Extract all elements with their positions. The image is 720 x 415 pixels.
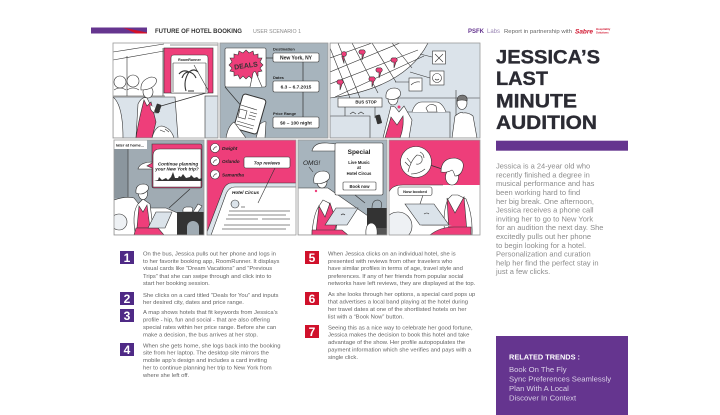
special card [335,143,383,195]
panel 7: now booked [384,140,480,240]
step 7: Seeing this as a nice way to celebrate her good fortune, [328,325,473,331]
panel 2: deals and search inputs [220,43,328,138]
field: price range: Price Range [273,111,297,116]
bus stop sign: BUS STOP [355,100,377,104]
step 7 [305,325,473,361]
intro paragraph: musical performance and has [496,179,595,188]
intro paragraph: help her find the perfect stay in [496,258,599,267]
step 3: make a decision, the bus arrives at her stop. [143,332,258,338]
step 7: single click. [328,355,358,361]
intro paragraph: been working hard to find [496,188,580,197]
phone in hand [226,93,266,138]
panel 6: special offer card [298,140,387,235]
step 5: networks have left reviews, they are displayed at the top. [328,281,476,287]
Jessica at bus stop [375,88,412,138]
hotel review card: Hotel Circus [232,190,260,195]
step 1 [120,251,280,287]
step 6: As she looks through her options, a special card pops up [328,292,476,298]
friend list [210,144,244,179]
panel 1: Jessica on the bus [113,43,218,138]
related trends panel: Book On The Fly [509,365,567,374]
step 1: to her favorite booking app, RoomRunner. It displays [143,259,280,265]
man [452,95,477,138]
special card: Live Music [348,160,370,165]
main title: MINUTE [496,90,577,112]
step 4: 4 [124,343,131,357]
bubble: continue planning [147,144,202,188]
friend list: Samantha [222,172,244,178]
step 5: 5 [309,251,316,265]
step 1: On the bus, Jessica pulls out her phone and logs in [143,252,276,258]
panel 4: later at home [111,140,204,235]
intro paragraph: for an audition the next day. She [496,223,603,232]
step 3: special rates within her price range. Before she can [143,325,276,331]
step 2: her desired city, dates and price range. [143,300,244,306]
intro paragraph: just a few clicks. [495,267,550,276]
bubble: continue planning: Continue planning [158,162,198,166]
lamp [138,162,154,169]
map pins [337,50,397,90]
connector lines [225,58,303,123]
step 1: 1 [124,251,131,265]
step 5 [305,251,476,287]
bus seats [330,90,480,138]
step 7: 7 [309,325,316,339]
step 3: profile - hip, fun and social - that are also offering [143,317,270,323]
callout: top reviews: Top reviews [254,160,281,166]
partner credits: Sabre [575,28,593,36]
Jessica with laptop [134,184,172,235]
special card: Special [348,149,371,156]
partner credits: Report in partnership with [504,29,572,35]
sofa [114,197,180,235]
intro paragraph: recently finished a degree in [496,170,590,179]
step 3: 3 [124,309,131,323]
special card: at [357,165,361,170]
callout: now booked: Now booked [403,189,427,194]
intro paragraph: excitedly pulls out her phone [496,232,591,241]
step 7: payment information which she verifies and pays with a [328,347,472,353]
header bar logo [91,28,147,34]
intro paragraph: to begin looking for a hotel. [496,241,586,250]
shopping bag [367,200,387,235]
step 2: She clicks on a card titled “Deals for You” and inputs [143,293,279,299]
laptop [405,204,452,226]
step 6: her travel dates at one of the shortlisted hotels on her [328,307,466,313]
special card: Book now [349,184,370,189]
step 1: visual cards like “Dream Vacations” and “Previous [143,266,272,272]
step 1: Trips” that she can swipe through and click into to [143,274,272,280]
side table [177,204,204,235]
intro paragraph: Personalization and curation [496,250,591,259]
step 5: have similar profiles in terms of age, travel style and [328,266,463,272]
intro paragraph: Jessica receives a phone call [496,206,594,215]
step 1: start her booking session. [143,281,210,287]
step 6: list with a “Book Now” button. [328,315,404,321]
main title: LAST [496,68,548,90]
friend list: Dwight [222,146,238,151]
main title: AUDITION [496,112,597,134]
related trends panel: Sync Preferences Seamlessly [509,374,611,383]
step 4: where she left off. [142,373,190,379]
Jessica with phone [136,77,174,138]
partner credits: Hospitality [596,27,611,31]
header title: FUTURE OF HOTEL BOOKING [155,28,242,35]
step 4 [120,343,280,379]
field: destination: Destination [273,46,295,52]
caption: later at home... [116,142,144,148]
map [330,43,432,98]
map icons [409,51,446,91]
step 7: advantage of the show. Her profile autopopulates the [328,340,465,346]
step 3: A map shows hotels that fit keywords from Jessica’s [143,310,278,316]
special card: Hotel Circus [347,171,372,176]
main title [496,46,600,134]
related trends panel [496,336,628,415]
step 2: 2 [124,292,131,306]
header subtitle: USER SCENARIO 1 [253,29,301,35]
step 5: preferences. If any of her friends from popular social [328,274,463,280]
field: price range [273,111,319,128]
partner credits: Labs [487,29,500,35]
field: destination [273,46,319,62]
sofa cushion [384,212,412,240]
deals inset: DEALS [234,61,259,72]
field: price range: $0 – 100 night [280,120,312,126]
thought circle [400,146,442,178]
step 6: that advertises a local band playing at the hotel during [328,300,468,306]
step 4: mobile app’s design and includes a card inviting [143,358,267,364]
step 7: Jessica makes the decision to book this hotel and take [328,333,469,339]
friend list: Orlando [222,159,240,164]
bus stop sign [338,98,382,118]
bus seats [113,96,218,138]
step 5: When Jessica clicks on an individual hotel, she is [328,252,456,258]
lamp [312,143,336,151]
field: dates: 6.3 – 6.7.2015 [281,84,312,90]
intro paragraph: Jessica is a 24-year old who [496,162,590,170]
main title: JESSICA’S [496,46,600,68]
step 6 [305,292,476,321]
related trends panel: Discover In Context [509,393,577,402]
panel 5: friends and top reviews [207,140,298,238]
partner credits: Solutions [596,30,609,34]
title accent bar [496,141,628,151]
app card on pink: RoomRunner [178,58,201,62]
step 3 [120,309,278,338]
related trends panel: RELATED TRENDS : [509,352,580,361]
field: dates: Dates [273,75,285,80]
background passengers [114,75,139,90]
panel 3: hotel map and bus stop [330,43,480,138]
partner credits [468,27,611,36]
intro paragraph: her big break. One afternoon, [496,197,594,206]
bubble: continue planning: your New York trip? [154,166,199,172]
step 5: presented with reviews from other travelers who [328,259,453,265]
step 4: her to continue planning her trip to New York from [143,365,272,371]
exclamation: OMG: OMG! [303,160,321,167]
field: destination: New York, NY [280,56,313,62]
related trends panel: Plan With A Local [509,384,569,393]
step 2 [120,292,279,306]
pointer line [161,93,206,106]
Jessica booked [430,158,472,235]
partner credits: PSFK [468,29,485,35]
sofa and room [298,188,367,234]
step 4: site from her laptop. The desktop site mirrors the [143,351,269,357]
step 6: 6 [309,292,316,306]
intro paragraph: inviting her to go to New York [496,214,593,223]
step 4: When she gets home, she logs back into the booking [143,343,280,349]
Jessica surprised [312,171,358,235]
field: dates [273,75,319,92]
